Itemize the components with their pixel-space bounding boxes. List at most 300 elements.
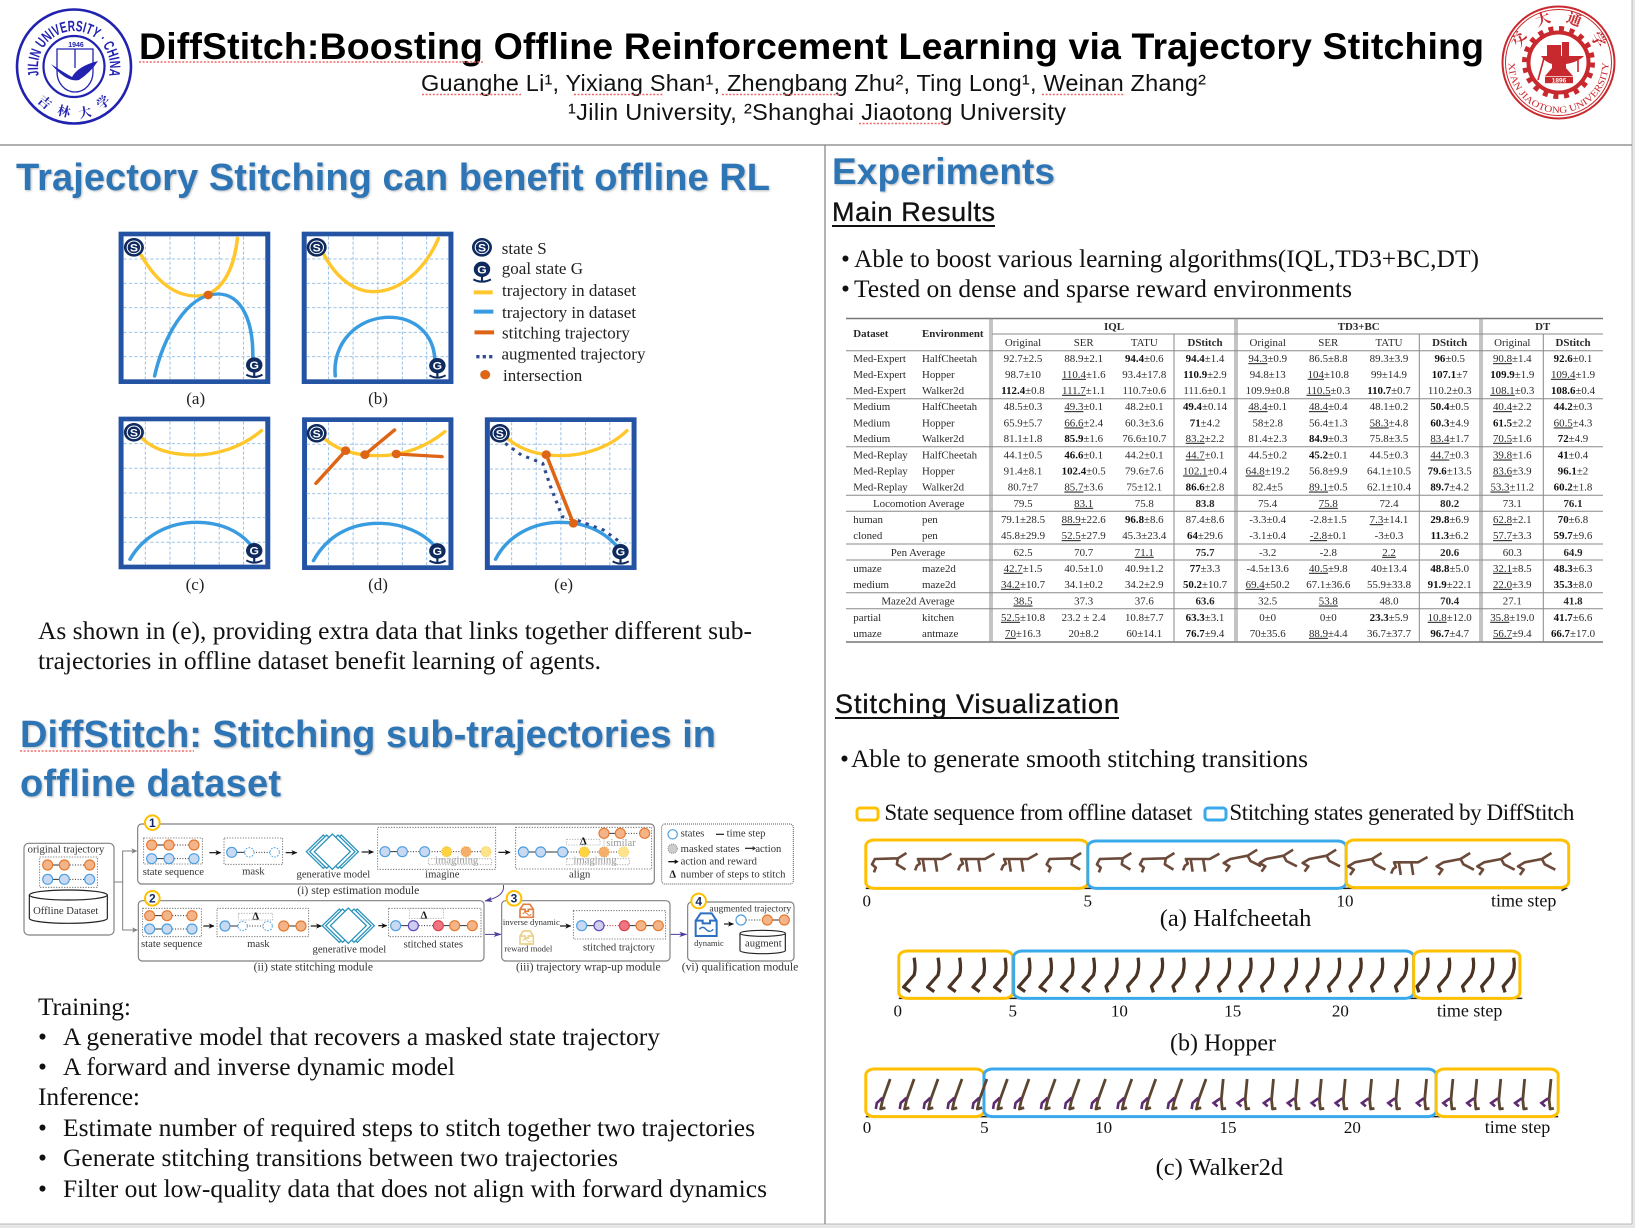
row: Locomotion Average [873, 498, 1583, 510]
method bullets: Filter out low-quality data that does not align with forward dynamics [63, 1174, 767, 1203]
row: Med-Replay HalfCheetah: 44.2±0.1 [1125, 450, 1164, 462]
module 3: trajectory wrap-up [502, 891, 670, 961]
method bullets: • [38, 1113, 47, 1142]
panel b [304, 234, 451, 382]
legend labels: trajectory in dataset [502, 281, 636, 300]
row: human pen: 96.8±8.6 [1125, 514, 1164, 526]
module 4: qualification [688, 894, 794, 961]
table header: Original [1250, 337, 1286, 349]
row: Med-Replay Hopper: 102.1±0.4 [1183, 466, 1228, 478]
row: umaze antmaze: 70±35.6 [1250, 628, 1286, 640]
row: partial kitchen: 35.8±19.0 [1490, 612, 1535, 624]
row: umaze maze2d: -4.5±13.6 [1247, 563, 1289, 575]
results bullets: • [841, 244, 850, 273]
row: Med-Expert Hopper: 99±14.9 [1371, 369, 1407, 381]
row: Med-Replay HalfCheetah: 44.1±0.5 [1004, 450, 1043, 462]
row: Med-Expert Hopper: 110.4±1.6 [1062, 369, 1106, 381]
row: Medium HalfCheetah: HalfCheetah [922, 401, 978, 413]
row: Medium Walker2d: 85.9±1.6 [1064, 433, 1104, 445]
row: cloned pen: -2.8±0.1 [1310, 530, 1347, 542]
row: Medium Hopper: 60.3±3.6 [1125, 417, 1164, 429]
row: Locomotion Average: 83.1 [1074, 498, 1093, 510]
heading: Trajectory Stitching: Trajectory Stitching can benefit offline RL [16, 157, 770, 199]
row: umaze antmaze: 36.7±37.7 [1367, 628, 1412, 640]
panel captions: (c) [186, 575, 204, 594]
diagram legend: action [755, 844, 782, 855]
row: Maze2d Average: 37.6 [1135, 596, 1154, 608]
diagram legend: Δ [669, 870, 676, 881]
row: Med-Replay Walker2d: 89.7±4.2 [1430, 482, 1469, 494]
spellcheck underlines [20, 62, 1125, 751]
row: human pen: pen [922, 514, 938, 526]
row: Med-Expert Walker2d: 111.7±1.1 [1062, 385, 1105, 397]
panel c: G [249, 545, 259, 558]
row: Locomotion Average: Locomotion Average [873, 498, 965, 510]
row: Med-Expert HalfCheetah: 90.8±1.4 [1493, 353, 1532, 365]
arrow from module 2 to module 3 [485, 933, 501, 936]
logo: Jilin University: JILIN UNIVERSITY · CHINA [28, 20, 120, 76]
row: Medium HalfCheetah: Medium [853, 401, 891, 413]
affiliations: ¹Jilin University, ²Shanghai Jiaotong University [568, 99, 1066, 125]
row: Med-Expert HalfCheetah [853, 353, 1592, 365]
panel e [487, 420, 634, 568]
diagram legend: action and reward [681, 856, 758, 867]
caption: wrap-up: (iii) trajectory wrap-up module [516, 961, 661, 974]
row: Med-Replay HalfCheetah: Med-Replay [853, 450, 908, 462]
logo: Xi'an Jiaotong University [1502, 6, 1616, 120]
module 1: step estimation: mask [242, 867, 265, 878]
row: Maze2d Average: 48.0 [1379, 596, 1399, 608]
panel captions: (e) [554, 575, 573, 594]
row: Pen Average [891, 547, 1583, 559]
row: Pen Average: Pen Average [891, 547, 945, 559]
module 2: state stitching: Δ [252, 911, 259, 922]
table header: Dataset [853, 328, 889, 340]
row: Med-Expert Walker2d: 109.9±0.8 [1246, 385, 1290, 397]
module 4: qualification: augmented trajectory [709, 903, 791, 914]
visualization legend [857, 800, 1575, 825]
row: partial kitchen: 23.3±5.9 [1370, 612, 1408, 624]
row: Med-Replay Walker2d: 85.7±3.6 [1064, 482, 1104, 494]
panel captions [186, 389, 573, 594]
module 2: state stitching: stitched states [404, 939, 463, 950]
box: original trajectory: original trajectory [28, 845, 105, 856]
row: umaze antmaze: 70±16.3 [1005, 628, 1042, 640]
strip: Hopper: 10 [1111, 1002, 1128, 1021]
logo: Xi'an Jiaotong University: 1896 [1552, 78, 1567, 84]
row: umaze maze2d: 48.3±6.3 [1554, 563, 1593, 575]
strip: Halfcheetah: time step [1491, 891, 1556, 911]
panel d: G [433, 545, 442, 558]
row: umaze maze2d: 40±13.4 [1371, 563, 1408, 575]
table header: IQL [1104, 321, 1124, 333]
row: Med-Expert Walker2d: 110.5±0.3 [1306, 385, 1351, 397]
row: Med-Replay Walker2d: 82.4±5 [1252, 482, 1283, 494]
paragraph: trajectory stitching: As shown in (e), providing extra data that links together different sub- [38, 616, 752, 645]
method bullets: Generate stitching transitions between two trajectories [63, 1143, 618, 1172]
results bullets: Tested on dense and sparse reward environments [854, 274, 1352, 303]
row: Maze2d Average: 63.6 [1195, 596, 1215, 608]
row: Medium Walker2d: 72±4.9 [1558, 433, 1588, 445]
module 1: step estimation: similar [606, 838, 636, 849]
legend labels: trajectory in dataset [502, 303, 636, 322]
row: Med-Expert Walker2d: Med-Expert [853, 385, 906, 397]
row: Medium Walker2d: 81.1±1.8 [1004, 433, 1043, 445]
row: Locomotion Average: 72.4 [1379, 498, 1399, 510]
architecture diagram [24, 815, 798, 974]
table header [853, 321, 1591, 349]
row: umaze maze2d: 40.9±1.2 [1125, 563, 1164, 575]
table header: DT [1535, 321, 1551, 333]
row: Med-Expert Hopper [853, 369, 1595, 381]
row: Medium Walker2d [853, 433, 1588, 445]
row: human pen [853, 514, 1589, 526]
row: Medium Walker2d: 83.2±2.2 [1186, 433, 1224, 445]
row: Med-Expert Hopper: 98.7±10 [1005, 369, 1042, 381]
strip: Walker2d: 5 [980, 1118, 989, 1137]
caption: state stitching: (ii) state stitching module [254, 961, 373, 974]
row: Medium Hopper: 60.3±4.9 [1430, 417, 1469, 429]
results bullets: • [841, 274, 850, 303]
table header: SER [1318, 337, 1339, 349]
row: umaze antmaze: 96.7±4.7 [1430, 628, 1470, 640]
row: Med-Expert Walker2d: 108.1±0.3 [1490, 385, 1535, 397]
row: Locomotion Average: 75.4 [1258, 498, 1278, 510]
row: medium maze2d: 50.2±10.7 [1183, 579, 1228, 591]
row: partial kitchen: 10.8±7.7 [1125, 612, 1164, 624]
row: Medium HalfCheetah: 48.1±0.2 [1370, 401, 1408, 413]
row: partial kitchen: 52.5±10.8 [1001, 612, 1046, 624]
panel b: G [433, 360, 442, 373]
row: Locomotion Average: 79.5 [1013, 498, 1033, 510]
row: Medium Hopper: 71±4.2 [1190, 417, 1220, 429]
row: Med-Replay Walker2d: 53.3±11.2 [1490, 482, 1534, 494]
row: partial kitchen: 23.2 ± 2.4 [1062, 612, 1106, 624]
row: Medium HalfCheetah: 49.3±0.1 [1064, 401, 1103, 413]
row: Med-Expert HalfCheetah: 96±0.5 [1434, 353, 1465, 365]
row: Pen Average: 62.5 [1013, 547, 1033, 559]
module 2: state stitching [138, 891, 484, 961]
row: cloned pen: -3.1±0.4 [1249, 530, 1287, 542]
row: Locomotion Average: 80.2 [1440, 498, 1459, 510]
row: medium maze2d: 22.0±3.9 [1493, 579, 1532, 591]
module 1: step estimation: imagining [573, 856, 617, 867]
row: partial kitchen: 10.8±12.0 [1428, 612, 1472, 624]
legend labels: augmented trajectory [502, 344, 646, 364]
logo: Jilin University: 大 [77, 101, 93, 122]
results bullets [841, 244, 1479, 303]
strip: Halfcheetah [862, 840, 1569, 932]
table header: Original [1005, 337, 1041, 349]
row: Medium Hopper: 56.4±1.3 [1309, 417, 1348, 429]
heading: DiffStitch method: offline dataset [20, 763, 281, 805]
row: Med-Replay HalfCheetah: 44.7±0.1 [1186, 450, 1224, 462]
module 3: trajectory wrap-up: stitched trajctory [583, 943, 656, 954]
row: Pen Average: 75.7 [1195, 547, 1215, 559]
row: Maze2d Average: 53.8 [1319, 596, 1338, 608]
row: Med-Replay Walker2d: 89.1±0.5 [1309, 482, 1348, 494]
row: medium maze2d: medium [853, 579, 890, 591]
heading: DiffStitch method: DiffStitch: Stitching sub-trajectories in [20, 714, 716, 756]
legend markers: G [477, 264, 487, 276]
row: Medium HalfCheetah: 50.4±0.5 [1430, 401, 1470, 413]
row: Pen Average: 2.2 [1382, 547, 1396, 559]
figure: trajectory stitching panels a to e [121, 234, 646, 594]
logo: Xi'an Jiaotong University: 交 大 通 学 [1511, 10, 1607, 48]
table header: TATU [1376, 337, 1403, 349]
panel captions: (d) [368, 575, 388, 594]
strip: Walker2d: 20 [1344, 1118, 1361, 1137]
row: cloned pen: pen [922, 530, 938, 542]
strip: Walker2d: time step [1485, 1117, 1550, 1137]
table header: DStitch [1187, 337, 1223, 349]
row: Medium Hopper: 58.3±4.8 [1370, 417, 1409, 429]
method bullets: • [38, 1052, 47, 1081]
strip: Hopper: time step [1437, 1001, 1502, 1021]
row: cloned pen: -3±0.3 [1375, 530, 1404, 542]
row: medium maze2d: 67.1±36.6 [1306, 579, 1351, 591]
row: Medium Hopper: 58±2.8 [1252, 417, 1283, 429]
row: Med-Expert Hopper: 109.9±1.9 [1490, 369, 1534, 381]
row: Med-Expert HalfCheetah: 94.4±0.6 [1125, 353, 1164, 365]
strip: Walker2d: 10 [1095, 1118, 1112, 1137]
row: cloned pen: 45.8±29.9 [1001, 530, 1045, 542]
strip: Walker2d: (c) Walker2d [1156, 1154, 1283, 1181]
logo: Jilin University: 学 [92, 90, 114, 113]
row: Medium HalfCheetah: 49.4±0.14 [1183, 401, 1228, 413]
row: Med-Expert HalfCheetah: 86.5±8.8 [1309, 353, 1348, 365]
row: Locomotion Average: 75.8 [1135, 498, 1154, 510]
row: Pen Average: -3.2 [1259, 547, 1276, 559]
panel b: S [313, 242, 321, 254]
legend labels: stitching trajectory [502, 324, 630, 342]
row: Medium HalfCheetah: 44.2±0.3 [1554, 401, 1593, 413]
row: Medium Walker2d: 84.9±0.3 [1309, 433, 1348, 445]
heading: DiffStitch method [20, 714, 716, 805]
table header: Environment [922, 328, 984, 340]
row: Med-Expert Walker2d: 110.7±0.7 [1367, 385, 1411, 397]
row: Med-Replay Hopper: Med-Replay [853, 466, 908, 478]
row: cloned pen [853, 530, 1593, 542]
row: human pen: 62.8±2.1 [1493, 514, 1532, 526]
row: cloned pen: 45.3±23.4 [1122, 530, 1167, 542]
strip: Halfcheetah: 0 [862, 892, 871, 911]
row: umaze antmaze: antmaze [922, 628, 958, 640]
row: Med-Replay Walker2d: 75±12.1 [1126, 482, 1162, 494]
row: Med-Replay Walker2d: 62.1±10.4 [1367, 482, 1412, 494]
row: medium maze2d [853, 579, 1593, 591]
row: medium maze2d: 55.9±33.8 [1367, 579, 1412, 591]
module 3: trajectory wrap-up: inverse dynamic [503, 917, 560, 927]
row: Medium Walker2d: 83.4±1.7 [1430, 433, 1470, 445]
diagram legend: masked states [681, 844, 740, 855]
row: Medium Walker2d: 70.5±1.6 [1493, 433, 1532, 445]
row: umaze antmaze: 56.7±9.4 [1493, 628, 1532, 640]
results table [846, 318, 1603, 642]
row: Med-Expert Hopper: 109.4±1.9 [1551, 369, 1595, 381]
row: Maze2d Average: 41.8 [1563, 596, 1583, 608]
row: Maze2d Average: 38.5 [1013, 596, 1033, 608]
legend markers [472, 238, 494, 379]
table header: Original [1494, 337, 1530, 349]
diagram legend [662, 824, 793, 884]
row: Med-Replay HalfCheetah [853, 450, 1589, 462]
row: Med-Expert Walker2d: 108.6±0.4 [1551, 385, 1596, 397]
row: Med-Replay Hopper: 96.1±2 [1558, 466, 1588, 478]
row: Med-Expert HalfCheetah: 94.3±0.9 [1248, 353, 1287, 365]
row: Med-Replay Hopper: 102.4±0.5 [1062, 466, 1106, 478]
legend labels: state S [502, 239, 547, 258]
method bullets: • [38, 1143, 47, 1172]
row: Medium Walker2d: 75.8±3.5 [1370, 433, 1409, 445]
row: cloned pen: 52.5±27.9 [1062, 530, 1106, 542]
row: cloned pen: 57.7±3.3 [1493, 530, 1532, 542]
row: Medium Hopper: 65.9±5.7 [1004, 417, 1043, 429]
row: umaze antmaze: 20±8.2 [1068, 628, 1099, 640]
row: umaze antmaze: 88.9±4.4 [1309, 628, 1348, 640]
row: Medium Hopper [853, 417, 1593, 429]
method bullets: Training: [38, 992, 131, 1021]
row: Med-Replay Hopper: 64.1±10.5 [1367, 466, 1412, 478]
row: Med-Expert Hopper: 94.8±13 [1250, 369, 1286, 381]
row: Pen Average: 71.1 [1135, 547, 1154, 559]
row: Medium Hopper: 60.5±4.3 [1554, 417, 1593, 429]
row: human pen: -3.3±0.4 [1249, 514, 1287, 526]
table header: DStitch [1432, 337, 1467, 349]
row: Locomotion Average: 76.1 [1563, 498, 1583, 510]
logo: Jilin University: 1946 [68, 42, 84, 49]
row: medium maze2d: 34.2±2.9 [1125, 579, 1164, 591]
method bullets: A forward and inverse dynamic model [63, 1052, 455, 1081]
row: Medium HalfCheetah: 48.4±0.1 [1248, 401, 1287, 413]
visualization bullet: Able to generate smooth stitching transitions [851, 744, 1308, 773]
row: medium maze2d: 35.3±8.0 [1554, 579, 1593, 591]
row: Medium HalfCheetah: 48.4±0.4 [1309, 401, 1348, 413]
row: umaze maze2d: 40.5±1.0 [1064, 563, 1104, 575]
row: partial kitchen: 63.3±3.1 [1186, 612, 1224, 624]
row: Med-Expert HalfCheetah: 94.4±1.4 [1186, 353, 1225, 365]
row: Med-Replay Hopper: 83.6±3.9 [1493, 466, 1532, 478]
module 1: step estimation: Δ [580, 837, 587, 848]
panel c [121, 419, 268, 567]
row: Pen Average: 60.3 [1503, 547, 1522, 559]
visualization bullet: • [840, 744, 849, 773]
row: Med-Expert Hopper: 104±10.8 [1308, 369, 1350, 381]
caption: step estimation: (i) step estimation module [297, 884, 419, 897]
logo: Jilin University: 林 [56, 100, 72, 121]
panel d [305, 420, 451, 568]
row: Med-Replay HalfCheetah: 45.2±0.1 [1309, 450, 1348, 462]
row: cloned pen: 64±29.6 [1187, 530, 1224, 542]
row: Med-Replay Hopper: Hopper [922, 466, 955, 478]
logo: Xi'an Jiaotong University: XI'AN JIAOTONG UNIVERSITY [1508, 62, 1608, 113]
row: Med-Expert Hopper: 107.1±7 [1432, 369, 1468, 381]
module 2: state stitching: 2 [149, 892, 156, 906]
row: Med-Expert Walker2d [853, 385, 1596, 397]
row: umaze maze2d: umaze [853, 563, 882, 575]
logo: Jilin University [16, 8, 132, 125]
row: Med-Expert HalfCheetah: 89.3±3.9 [1370, 353, 1408, 365]
module 1: step estimation: state sequence [143, 867, 204, 878]
row: partial kitchen: 41.7±6.6 [1554, 612, 1593, 624]
diagram legend: states [681, 829, 704, 840]
row: Locomotion Average: 73.1 [1503, 498, 1522, 510]
row: Medium HalfCheetah: 48.5±0.3 [1004, 401, 1043, 413]
row: Medium HalfCheetah: 40.4±2.2 [1493, 401, 1532, 413]
panel c: S [130, 427, 138, 439]
panel d: S [313, 428, 321, 440]
row: Medium HalfCheetah: 48.2±0.1 [1125, 401, 1164, 413]
table header: DStitch [1555, 337, 1591, 349]
row: umaze maze2d: maze2d [922, 563, 956, 575]
row: Medium HalfCheetah [853, 401, 1593, 413]
subheading: Main Results: Main Results [832, 197, 995, 227]
row: umaze antmaze: 66.7±17.0 [1551, 628, 1596, 640]
row: human pen: 7.3±14.1 [1370, 514, 1408, 526]
title: DiffStitch:Boosting Offline Reinforcement Learning via Trajectory Stitching [139, 25, 1484, 67]
table header: TATU [1131, 337, 1158, 349]
row: Med-Expert Walker2d: Walker2d [922, 385, 965, 397]
row: Pen Average: 64.9 [1563, 547, 1583, 559]
panel e: G [616, 546, 625, 559]
module 1: step estimation: generative model [296, 870, 370, 881]
row: Med-Expert Walker2d: 110.2±0.3 [1428, 385, 1472, 397]
subheading: Stitching Visualization: Stitching Visualization [835, 689, 1119, 719]
row: Med-Replay Walker2d: 86.6±2.8 [1186, 482, 1225, 494]
table header: TD3+BC [1338, 321, 1380, 333]
row: Maze2d Average: Maze2d Average [881, 596, 955, 608]
row: cloned pen: cloned [853, 530, 883, 542]
arrow from module 3 to module 4 [671, 933, 687, 936]
row: Med-Expert HalfCheetah: 88.9±2.1 [1064, 353, 1103, 365]
row: Med-Expert Walker2d: 112.4±0.8 [1001, 385, 1045, 397]
module 2: state stitching: Δ [421, 910, 428, 921]
row: umaze antmaze: 76.7±9.4 [1186, 628, 1225, 640]
legend markers: S [478, 242, 486, 254]
row: umaze maze2d: 77±3.3 [1190, 563, 1221, 575]
row: cloned pen: 11.3±6.2 [1431, 530, 1469, 542]
module 2: state stitching: state sequence [141, 939, 203, 950]
table header: SER [1074, 337, 1094, 349]
row: Med-Replay Hopper: 91.4±8.1 [1004, 466, 1042, 478]
module 4: qualification: dynamic [694, 938, 724, 948]
row: Med-Replay HalfCheetah: 41±0.4 [1558, 450, 1589, 462]
row: Med-Replay HalfCheetah: 44.5±0.3 [1370, 450, 1409, 462]
panel captions: (b) [368, 389, 388, 408]
row: Med-Replay HalfCheetah: 46.6±0.1 [1064, 450, 1103, 462]
strip: Hopper: 20 [1332, 1002, 1349, 1021]
caption: qualification: (vi) qualification module [682, 961, 798, 974]
row: partial kitchen: 0±0 [1320, 612, 1337, 624]
row: Pen Average: -2.8 [1320, 547, 1337, 559]
row: Med-Expert HalfCheetah: 92.7±2.5 [1004, 353, 1043, 365]
row: human pen: 29.8±6.9 [1430, 514, 1469, 526]
row: human pen: -2.8±1.5 [1310, 514, 1347, 526]
row: Med-Replay Hopper: 64.8±19.2 [1246, 466, 1290, 478]
row: Locomotion Average: 83.8 [1195, 498, 1215, 510]
legend labels [502, 239, 646, 385]
row: partial kitchen [853, 612, 1593, 624]
row: partial kitchen: 0±0 [1259, 612, 1277, 624]
paragraph: trajectory stitching [38, 616, 752, 675]
curved arrow from module 1 to module 2 [485, 885, 504, 901]
diagram legend: number of steps to stitch [681, 870, 786, 881]
panel e: S [496, 428, 504, 440]
box: original trajectory [24, 843, 114, 935]
connector arrows [114, 851, 137, 930]
row: Maze2d Average: 37.3 [1074, 596, 1094, 608]
row: Locomotion Average: 75.8 [1319, 498, 1338, 510]
